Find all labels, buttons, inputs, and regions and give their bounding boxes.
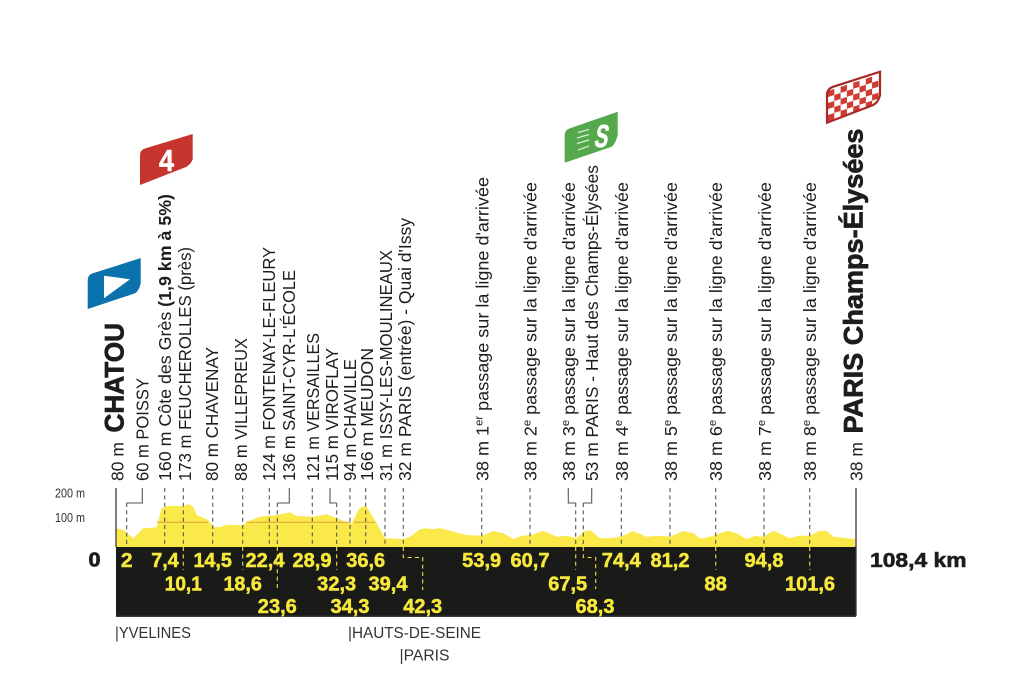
route waypoints: passage sur la ligne d'arrivée (559, 182, 579, 420)
stage profile infographic (56, 70, 966, 664)
route waypoints: 38 m 3 (559, 428, 579, 481)
icon: category 4 climb flag: 4 (159, 143, 175, 178)
elevation chart (55, 487, 856, 616)
altitude scale: 200 m (55, 487, 85, 501)
route waypoints: e (801, 420, 813, 426)
departments: |HAUTS-DE-SEINE (348, 625, 481, 642)
kilometre markers: 68,3 (576, 596, 614, 618)
kilometre markers: 53,9 (462, 550, 501, 572)
icon: category 4 climb flag (140, 134, 193, 185)
route waypoints: passage sur la ligne d'arrivée (800, 182, 820, 420)
kilometre markers: 23,6 (258, 596, 297, 618)
start distance: 0 (88, 550, 100, 572)
start town: CHATOU (99, 323, 129, 432)
kilometre markers: 60,7 (510, 550, 550, 572)
route waypoints: e (707, 420, 719, 426)
kilometre markers: 42,3 (403, 596, 442, 618)
route waypoints: e (613, 420, 625, 426)
kilometre markers: 14,5 (193, 550, 232, 572)
route waypoints: 94 m CHAVILLE (340, 359, 360, 481)
kilometre markers: 22,4 (246, 550, 285, 572)
route waypoints: 38 m 2 (521, 428, 541, 481)
route waypoints: 124 m FONTENAY-LE-FLEURY (259, 247, 279, 481)
route waypoints: passage sur la ligne d'arrivée (472, 177, 492, 416)
altitude scale (55, 487, 85, 525)
kilometre markers: 81,2 (650, 550, 690, 572)
icon: sprint flag: S (592, 118, 612, 154)
route waypoints: passage sur la ligne d'arrivée (521, 182, 541, 420)
total distance: 108,4 km (870, 550, 966, 572)
route waypoints: e (522, 420, 534, 426)
kilometre markers: 101,6 (785, 574, 835, 596)
route waypoints: 32 m PARIS (entrée) - Quai d'Issy (395, 218, 415, 481)
route waypoints: 31 m ISSY-LES-MOULINEAUX (376, 250, 396, 481)
route waypoints: passage sur la ligne d'arrivée (706, 182, 726, 420)
route waypoints: 115 m VIROFLAY (322, 348, 342, 481)
route waypoints: 38 m 4 (612, 428, 632, 481)
kilometre markers: 7,4 (151, 550, 180, 572)
distance band (116, 546, 856, 616)
route waypoints: 38 m 8 (800, 428, 820, 481)
route waypoints: 136 m SAINT-CYR-L'ÉCOLE (279, 270, 299, 481)
route waypoints: 121 m VERSAILLES (303, 333, 323, 481)
route waypoints: passage sur la ligne d'arrivée (661, 182, 681, 420)
route waypoints: 60 m POISSY (132, 378, 152, 481)
route waypoints: 38 m 7 (755, 428, 775, 481)
icon: sprint flag (565, 112, 618, 163)
route waypoints: 38 m 6 (706, 428, 726, 481)
route waypoints: passage sur la ligne d'arrivée (755, 182, 775, 420)
finish town: PARIS Champs-Élysées (838, 128, 868, 434)
route waypoints: 53 m PARIS - Haut des Champs-Élysées (582, 165, 602, 481)
kilometre markers: 2 (121, 550, 133, 572)
kilometre markers: 10,1 (165, 574, 202, 596)
elevation profile (116, 504, 855, 547)
route waypoints: 38 m 1 (472, 428, 492, 481)
kilometre markers: 88 (704, 574, 727, 596)
departments: |YVELINES (115, 625, 191, 642)
kilometre markers: 28,9 (292, 550, 332, 572)
route waypoints: 38 m (846, 442, 866, 481)
departments: |PARIS (400, 648, 450, 665)
route waypoints: 80 m (108, 442, 128, 481)
route waypoints: e (560, 420, 572, 426)
kilometre markers (121, 550, 835, 618)
kilometre markers: 32,3 (317, 574, 356, 596)
kilometre markers: 18,6 (223, 574, 262, 596)
route waypoints: 166 m MEUDON (357, 348, 377, 481)
route waypoints: 173 m FEUCHEROLLES (près) (175, 247, 195, 481)
route waypoints: e (756, 420, 768, 426)
route waypoints: 80 m CHAVENAY (202, 347, 222, 481)
icon: finish flag (827, 72, 880, 123)
altitude scale: 100 m (55, 511, 85, 525)
route waypoints: er (473, 415, 485, 426)
route waypoints (108, 165, 866, 481)
route waypoints: e (662, 420, 674, 426)
dashed markers (127, 488, 810, 546)
route waypoints: passage sur la ligne d'arrivée (612, 182, 632, 420)
kilometre markers: 34,3 (330, 596, 370, 618)
kilometre markers: 39,4 (368, 574, 408, 596)
route waypoints: 88 m VILLEPREUX (231, 338, 251, 481)
route waypoints: 160 m Côte des Grès (1,9 km à 5%) (155, 194, 175, 481)
axis lines (116, 488, 856, 616)
kilometre markers: 36,6 (346, 550, 385, 572)
kilometre markers: 94,8 (744, 550, 784, 572)
route waypoints: 38 m 5 (661, 428, 681, 481)
icon: start flag (88, 258, 141, 309)
kilometre markers: 67,5 (548, 574, 587, 596)
departments (115, 625, 481, 665)
kilometre markers: 74,4 (602, 550, 642, 572)
